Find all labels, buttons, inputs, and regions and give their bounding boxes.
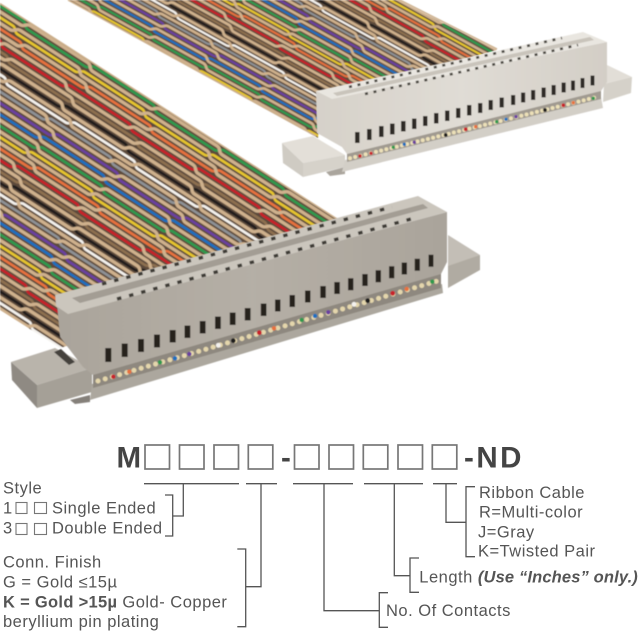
back connector slot and holes: [333, 37, 594, 96]
part number dash: -: [281, 442, 291, 474]
style mini boxes row 1: [16, 502, 46, 514]
back connector windows: [355, 76, 594, 143]
front connector front face: [57, 212, 447, 375]
connector finish legend: [3, 553, 227, 631]
connector finish legend: K = Gold >15µ Gold- Copper: [3, 594, 227, 612]
front connector: [11, 196, 480, 408]
back connector left flange: [282, 136, 345, 177]
back connector front face: [316, 42, 607, 154]
style mini boxes row 2: [16, 524, 46, 534]
part number suffix -ND: -ND: [464, 442, 524, 474]
front ribbon cable: [0, 4, 340, 348]
back connector bottom rail: [342, 97, 603, 172]
ribbon cable legend: Ribbon Cable: [479, 484, 585, 502]
back connector right flange: [603, 65, 632, 102]
style legend: 1: [3, 500, 13, 518]
back ribbon cable: [68, 0, 497, 138]
style legend: Style: [3, 480, 42, 498]
connector finish legend: Conn. Finish: [3, 553, 102, 571]
underlines and leader brackets: [144, 484, 475, 627]
front connector slot and holes: [72, 204, 428, 303]
length legend: Length (Use “Inches” only.): [419, 568, 638, 586]
front connector bottom rail: [90, 284, 443, 400]
front connector left flange: [11, 348, 92, 408]
back connector top face: [316, 32, 607, 99]
ribbon cable legend: [478, 484, 596, 561]
style legend: Double Ended: [52, 520, 163, 538]
ribbon cable legend: R=Multi-color: [479, 504, 583, 522]
front connector top face: [55, 196, 447, 314]
front connector right flange: [448, 235, 480, 288]
front connector pin recess: [93, 272, 441, 388]
style legend: [3, 480, 163, 538]
ribbon cable legend: K=Twisted Pair: [478, 543, 596, 561]
ribbon cable legend: J=Gray: [478, 523, 535, 541]
style legend: Single Ended: [52, 500, 156, 518]
connector finish legend: G = Gold ≤15µ: [3, 574, 118, 592]
part number title: [116, 442, 524, 474]
connector finish legend: beryllium pin plating: [3, 613, 159, 631]
front connector pins: [98, 280, 438, 381]
front connector windows: [105, 255, 434, 362]
back connector: [282, 32, 632, 177]
part number option boxes: [145, 445, 457, 469]
style legend: 3: [3, 520, 13, 538]
contacts legend: No. Of Contacts: [386, 602, 511, 620]
part number prefix M: M: [116, 442, 141, 474]
back connector pin recess: [347, 90, 601, 162]
back connector pins: [350, 97, 598, 158]
